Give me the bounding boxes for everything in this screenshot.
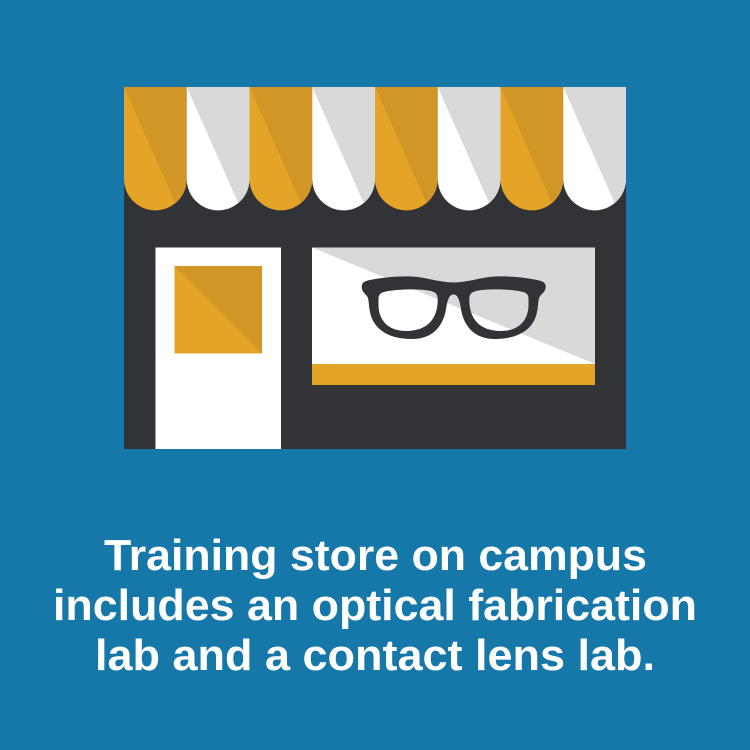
awning <box>124 87 626 210</box>
caption line 3: lab and a contact lens lab. <box>95 631 655 680</box>
caption <box>53 531 697 680</box>
caption line 1: Training store on campus <box>104 531 647 580</box>
storefront illustration <box>124 87 626 449</box>
building wall <box>124 87 626 449</box>
door window <box>174 266 262 354</box>
icon: glasses <box>362 276 546 339</box>
shop window <box>312 248 595 385</box>
door <box>156 248 281 449</box>
window sill <box>312 364 595 385</box>
caption line 2: includes an optical fabrication <box>53 581 697 630</box>
